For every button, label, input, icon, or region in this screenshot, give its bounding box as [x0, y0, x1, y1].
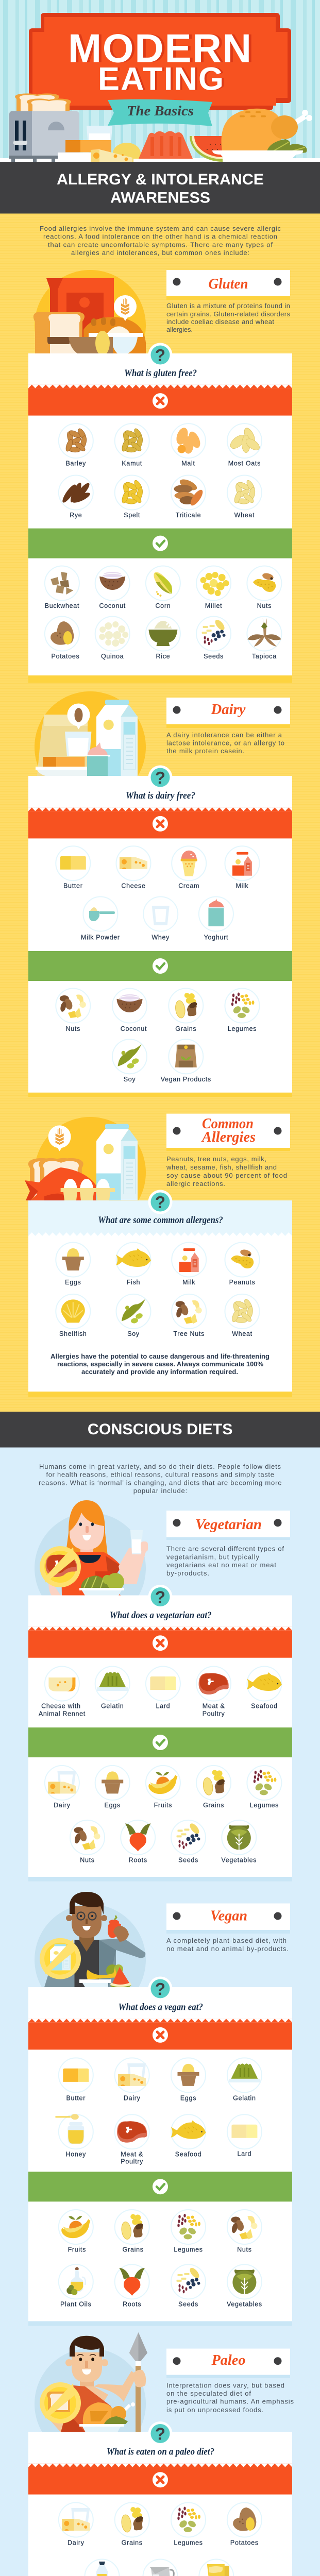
item: Tree Nuts: [172, 1294, 206, 1337]
text: vegetarian: There are several different types of: [166, 1545, 284, 1553]
item: Spelt: Spelt: [124, 512, 140, 519]
panel: what is gluten free: [28, 343, 292, 683]
item: Fish: [116, 1243, 151, 1286]
item: Rice: [146, 616, 180, 660]
intro text: allergies: that can create uncomfortable symptoms. There are many types of: [48, 241, 273, 248]
heading: common allergens: What are some common allergens?: [98, 1215, 223, 1226]
item: Cream: Cream: [178, 883, 199, 890]
item: Seeds: [196, 616, 231, 660]
item: Rye: [59, 475, 93, 519]
item: Grains: Grains: [203, 1802, 224, 1809]
item: Peanuts: [225, 1243, 260, 1286]
item: Quinoa: Quinoa: [101, 653, 124, 660]
item: Coconut: Coconut: [99, 602, 126, 609]
item: Most Oats: [227, 423, 262, 467]
illustration: dairy: [35, 691, 146, 803]
item: Whey: Whey: [151, 934, 170, 941]
text: dairy: lactose intolerance, or an allergy to: [166, 739, 284, 747]
intro text: allergies: [40, 225, 281, 257]
section band: allergy and intolerance: [0, 162, 320, 213]
item: Lard: Lard: [156, 1703, 170, 1710]
item: Gelatin: Gelatin: [233, 2094, 256, 2102]
item: Honey: Honey: [65, 2151, 86, 2158]
heading: what is gluten free: What is gluten free?: [124, 368, 197, 379]
item: Fruits: Fruits: [68, 2246, 86, 2253]
section band: conscious diets: CONSCIOUS DIETS: [88, 1421, 232, 1438]
illustration: breakfast table: [0, 93, 320, 164]
item: Dairy: Dairy: [68, 2539, 85, 2547]
item: Tree Nuts: Tree Nuts: [173, 1330, 205, 1337]
item: Triticale: Triticale: [176, 512, 201, 519]
item: Cheese with Animal Rennet: Animal Rennet: [39, 1710, 86, 1718]
item: Rice: Rice: [156, 653, 170, 660]
item: Artificial Sweeteners: [197, 2560, 235, 2576]
item: Meat and Poultry: Poultry: [121, 2158, 143, 2165]
item: Dairy: [59, 2503, 93, 2547]
text: vegan: [166, 1937, 289, 1953]
text: gluten: include coeliac disease and wheat: [166, 318, 274, 326]
item: Nuts: [247, 566, 281, 609]
text: vegetarian: by-products.: [166, 1569, 209, 1577]
title: EATING: [100, 61, 226, 97]
plate: vegan title: [166, 1903, 290, 1934]
text: gluten: allergies.: [166, 326, 193, 333]
icon: question badge: [148, 1585, 172, 1609]
item: Coconut: Coconut: [121, 1025, 147, 1032]
item: Butter: [56, 846, 90, 890]
item: Seeds: Seeds: [204, 653, 224, 660]
item: Spelt: [115, 475, 149, 519]
intro text: allergies: Food allergies involve the immune system and can cause severe allergic: [40, 225, 281, 232]
illustration: vegetarian woman: [35, 1500, 148, 1624]
item: Lard: Lard: [237, 2150, 251, 2158]
item: Soy: [116, 1294, 150, 1337]
item: Vegetables: [221, 1820, 257, 1864]
text: gluten: certain grains. Gluten-related disorders: [166, 310, 291, 318]
item: Processed Oils: [78, 2560, 126, 2576]
illustration: common allergies: [25, 1117, 146, 1228]
item: Soy: Soy: [124, 1076, 136, 1083]
item: Nuts: [70, 1820, 105, 1864]
text: common allergies: wheat, sesame, fish, shellfish and: [166, 1163, 277, 1171]
plate: vegetarian title: [166, 1511, 290, 1540]
plate: gluten title: [166, 270, 290, 300]
note: allergy warning: accurately and provide any information required.: [81, 1368, 238, 1376]
band: vegans eat: [28, 2172, 292, 2201]
text: paleo: on the speculated diet of: [166, 2389, 251, 2397]
item: Tapioca: [247, 616, 281, 660]
item: Potatoes: [45, 616, 79, 660]
item: Malt: Malt: [181, 460, 195, 467]
illustration: paleo man: [35, 2332, 147, 2460]
heading: what is eaten on a paleo diet: What is eaten on a paleo diet?: [107, 2446, 214, 2458]
title sign: [29, 13, 291, 110]
text: paleo: [166, 2381, 294, 2414]
panel: what does a vegan eat: [28, 1976, 292, 2326]
section band: conscious diets: [0, 1412, 320, 1448]
item: Malt: [171, 423, 206, 467]
item: Barley: [59, 423, 93, 467]
item: Milk Powder: [81, 896, 120, 941]
item: Eggs: [171, 2058, 206, 2102]
intro text: diets: popular include:: [133, 1487, 187, 1495]
text: vegan: A completely plant-based diet, with: [166, 1937, 287, 1944]
item: Peanuts: Peanuts: [229, 1279, 255, 1286]
band: paleo avoids: [28, 2464, 292, 2495]
text: paleo: Interpretation does vary, but based: [166, 2381, 284, 2389]
text: vegetarian: vegetarians eat no meat or meat: [166, 1561, 276, 1569]
heading: what does a vegan eat: What does a vegan eat?: [118, 2002, 203, 2013]
band: contains dairy: [28, 807, 292, 838]
item: Potatoes: Potatoes: [52, 653, 79, 660]
item: Roots: Roots: [123, 2301, 141, 2308]
item: Milk: Milk: [235, 883, 249, 890]
item: Coconut: [95, 566, 130, 609]
icon: question badge: [148, 2421, 172, 2446]
item: Fruits: [59, 2210, 93, 2253]
item: Milk: Milk: [182, 1279, 195, 1286]
panel: what is dairy free: [28, 766, 292, 1097]
plate: common allergies title: Allergies: [201, 1129, 256, 1145]
item: Meat and Poultry: Meat &: [203, 1703, 225, 1710]
item: Gelatin: [95, 1666, 130, 1710]
item: Milk: [172, 1243, 206, 1286]
heading: what does a vegetarian eat: What does a vegetarian eat?: [110, 1610, 212, 1621]
item: Seeds: [171, 1820, 206, 1864]
item: Meat and Poultry: Poultry: [203, 1710, 225, 1718]
item: Fish: Fish: [127, 1279, 140, 1286]
intro text: allergies: reactions. A food intolerance on the other hand is a chemical reaction: [43, 233, 277, 240]
item: Meat and Poultry: Meat &: [121, 2151, 143, 2158]
item: Cheese with Animal Rennet: Cheese with: [41, 1703, 81, 1710]
item: Eggs: [95, 1766, 130, 1809]
item: Buckwheat: [45, 566, 79, 609]
illustration: gluten: [33, 270, 146, 381]
item: Grains: [196, 1766, 231, 1809]
item: Butter: [59, 2058, 93, 2102]
text: common allergies: [166, 1155, 287, 1188]
item: Coconut: [112, 988, 147, 1032]
item: Cheese: [116, 846, 150, 890]
item: Plant Oils: [59, 2264, 93, 2308]
item: Dairy: [45, 1766, 79, 1809]
item: Kamut: Kamut: [122, 460, 142, 467]
item: Kamut: [115, 423, 149, 467]
ribbon: The Basics: [108, 99, 212, 126]
title: [68, 26, 254, 97]
item: Yoghurt: Yoghurt: [204, 934, 228, 941]
panel: what is eaten on a paleo diet: [28, 2421, 292, 2576]
item: Vegan Products: [161, 1039, 211, 1083]
item: Legumes: [171, 2503, 206, 2547]
item: Butter: Butter: [63, 883, 83, 890]
item: Rye: Rye: [70, 512, 82, 519]
item: Grains: Grains: [123, 2246, 144, 2253]
item: Eggs: [56, 1243, 90, 1286]
item: Grains: [115, 2503, 149, 2547]
note: allergy warning: Allergies have the potential to cause dangerous and life-threatening: [50, 1352, 270, 1360]
text: vegetarian: vegetarianism, but typically: [166, 1553, 260, 1561]
item: Refined Sugars: [136, 2560, 185, 2576]
item: Millet: [196, 566, 231, 609]
item: Potatoes: [227, 2503, 262, 2547]
item: Gelatin: [227, 2058, 262, 2102]
plate: common allergies title: Common: [202, 1115, 254, 1132]
item: Roots: Roots: [129, 1856, 147, 1863]
item: Soy: Soy: [127, 1330, 140, 1337]
item: Legumes: Legumes: [228, 1025, 257, 1032]
item: Butter: Butter: [66, 2094, 86, 2102]
ribbon: The Basics: The Basics: [127, 103, 194, 118]
note: allergy warning: reactions, especially in severe cases. Always communicate 100%: [57, 1360, 263, 1368]
item: Corn: Corn: [155, 602, 171, 609]
item: Shellfish: Shellfish: [59, 1330, 87, 1337]
item: Wheat: Wheat: [234, 512, 255, 519]
title: MODERN: [68, 26, 251, 71]
band: not gluten free: [28, 385, 292, 416]
item: Nuts: Nuts: [66, 1025, 80, 1032]
item: Grains: Grains: [175, 1025, 196, 1032]
item: Legumes: [247, 1766, 281, 1809]
item: Vegetables: Vegetables: [221, 1856, 257, 1863]
item: Cheese with Animal Rennet: [39, 1666, 86, 1718]
intro text: allergies: allergies and intolerances, but common ones include:: [71, 249, 249, 257]
item: Legumes: [171, 2210, 206, 2253]
note: allergy warning: [50, 1352, 270, 1376]
item: Fruits: [146, 1766, 180, 1809]
intro text: diets: reasons. What is ‘normal’ is changing, and diets that are becoming more: [39, 1479, 281, 1487]
plate: gluten title: Gluten: [208, 276, 248, 292]
item: Vegan Products: Vegan Products: [161, 1076, 211, 1083]
item: Lard: [146, 1666, 180, 1710]
item: Barley: Barley: [65, 460, 86, 467]
item: Cream: [172, 846, 206, 890]
icon: question badge: [148, 766, 172, 789]
header illustration background: [0, 0, 320, 162]
icon: question badge: [148, 343, 172, 367]
text: dairy: [166, 731, 284, 755]
plate: dairy title: Dairy: [211, 701, 246, 718]
item: Soy: [112, 1039, 147, 1083]
panel: what does a vegetarian eat: [28, 1585, 292, 1882]
text: common allergies: allergic reactions.: [166, 1180, 225, 1188]
item: Vegetables: [227, 2264, 262, 2308]
item: Seeds: Seeds: [178, 1856, 198, 1863]
item: Grains: [169, 988, 203, 1032]
text: vegan: no meat and no animal by-products.: [166, 1945, 289, 1953]
item: Triticale: [171, 475, 206, 519]
plate: vegan title: Vegan: [210, 1907, 247, 1924]
plate: common allergies title: [166, 1114, 290, 1151]
item: Seeds: Seeds: [178, 2301, 198, 2308]
item: Vegetables: Vegetables: [227, 2301, 262, 2308]
band: vegetarians eat: [28, 1727, 292, 1757]
icon: question badge: [148, 1190, 172, 1214]
plate: vegetarian title: Vegetarian: [195, 1516, 262, 1533]
intro text: diets: for health reasons, ethical reasons, cultural reasons and simply taste: [46, 1470, 274, 1479]
text: gluten: [166, 302, 291, 333]
item: Nuts: Nuts: [257, 602, 272, 609]
item: Dairy: Dairy: [54, 1802, 71, 1809]
item: Seafood: Seafood: [175, 2151, 201, 2158]
item: Potatoes: Potatoes: [230, 2539, 259, 2547]
band: vegans avoid: [28, 2019, 292, 2049]
item: Roots: [121, 1820, 155, 1864]
item: Eggs: Eggs: [180, 2094, 196, 2102]
heading: what is dairy free: What is dairy free?: [126, 790, 195, 801]
item: Millet: Millet: [205, 602, 222, 609]
item: Dairy: [115, 2058, 149, 2102]
item: Milk: [225, 846, 260, 890]
item: Eggs: Eggs: [65, 1279, 81, 1286]
text: common allergies: Peanuts, tree nuts, eggs, milk,: [166, 1155, 266, 1163]
plate: dairy title: [166, 698, 290, 728]
text: paleo: is put on unprocessed foods.: [166, 2406, 263, 2414]
item: Corn: [146, 566, 180, 609]
item: Legumes: [225, 988, 260, 1032]
band: dairy free: [28, 951, 292, 981]
plate: paleo title: Paleo: [211, 2352, 245, 2368]
item: Nuts: Nuts: [80, 1856, 95, 1863]
item: Wheat: [225, 1294, 260, 1337]
item: Shellfish: [56, 1294, 90, 1337]
section band: allergy and intolerance: AWARENESS: [110, 189, 210, 206]
item: Legumes: Legumes: [174, 2539, 203, 2547]
item: Plant Oils: Plant Oils: [60, 2301, 92, 2308]
item: Legumes: Legumes: [174, 2246, 203, 2253]
item: Dairy: Dairy: [124, 2094, 141, 2102]
item: Gelatin: Gelatin: [101, 1703, 124, 1710]
item: Legumes: Legumes: [250, 1802, 279, 1809]
item: Meat and Poultry: [196, 1666, 231, 1718]
item: Most Oats: Most Oats: [228, 460, 261, 467]
text: dairy: the milk protein casein.: [166, 747, 244, 755]
item: Cheese: Cheese: [121, 883, 146, 890]
item: Quinoa: [95, 616, 130, 660]
item: Milk Powder: Milk Powder: [81, 934, 120, 941]
item: Nuts: Nuts: [237, 2246, 252, 2253]
item: Whey: [143, 896, 178, 941]
item: Nuts: [227, 2210, 262, 2253]
item: Grains: [115, 2210, 149, 2253]
band: gluten free: [28, 529, 292, 558]
band: vegetarians avoid: [28, 1627, 292, 1658]
text: dairy: A dairy intolerance can be either a: [166, 731, 282, 739]
item: Roots: [115, 2264, 149, 2308]
text: common allergies: soy cause about 90 percent of food: [166, 1172, 287, 1179]
item: Fruits: Fruits: [154, 1802, 172, 1809]
intro text: diets: [39, 1463, 281, 1495]
item: Seafood: Seafood: [251, 1703, 278, 1710]
item: Buckwheat: Buckwheat: [45, 602, 79, 609]
item: Yoghurt: [199, 896, 233, 941]
item: Honey: [55, 2114, 93, 2158]
item: Seeds: [171, 2264, 206, 2308]
item: Meat and Poultry: [115, 2114, 149, 2165]
item: Grains: Grains: [122, 2539, 143, 2547]
text: gluten: Gluten is a mixture of proteins found in: [166, 302, 290, 310]
title: MODERN: [71, 26, 254, 71]
item: Seafood: [171, 2114, 206, 2158]
section band: allergy and intolerance: ALLERGY & INTOLERANCE: [57, 171, 264, 188]
intro text: diets: Humans come in great variety, and so do their diets. People follow diets: [39, 1463, 281, 1470]
panel: common allergens: [28, 1190, 292, 1397]
item: Wheat: Wheat: [232, 1330, 252, 1337]
item: Seafood: [247, 1666, 282, 1710]
text: paleo: pre-agricultural humans. An emphasis: [166, 2398, 294, 2405]
item: Nuts: [56, 988, 90, 1032]
item: Eggs: Eggs: [105, 1802, 121, 1809]
item: Tapioca: Tapioca: [252, 653, 277, 660]
illustration: vegan man: [35, 1892, 146, 2015]
text: vegetarian: [166, 1545, 284, 1577]
title: EATING: [98, 61, 224, 97]
item: Wheat: [227, 475, 262, 519]
item: Lard: [227, 2114, 262, 2158]
plate: paleo title: [166, 2349, 290, 2378]
icon: question badge: [148, 1976, 172, 2001]
